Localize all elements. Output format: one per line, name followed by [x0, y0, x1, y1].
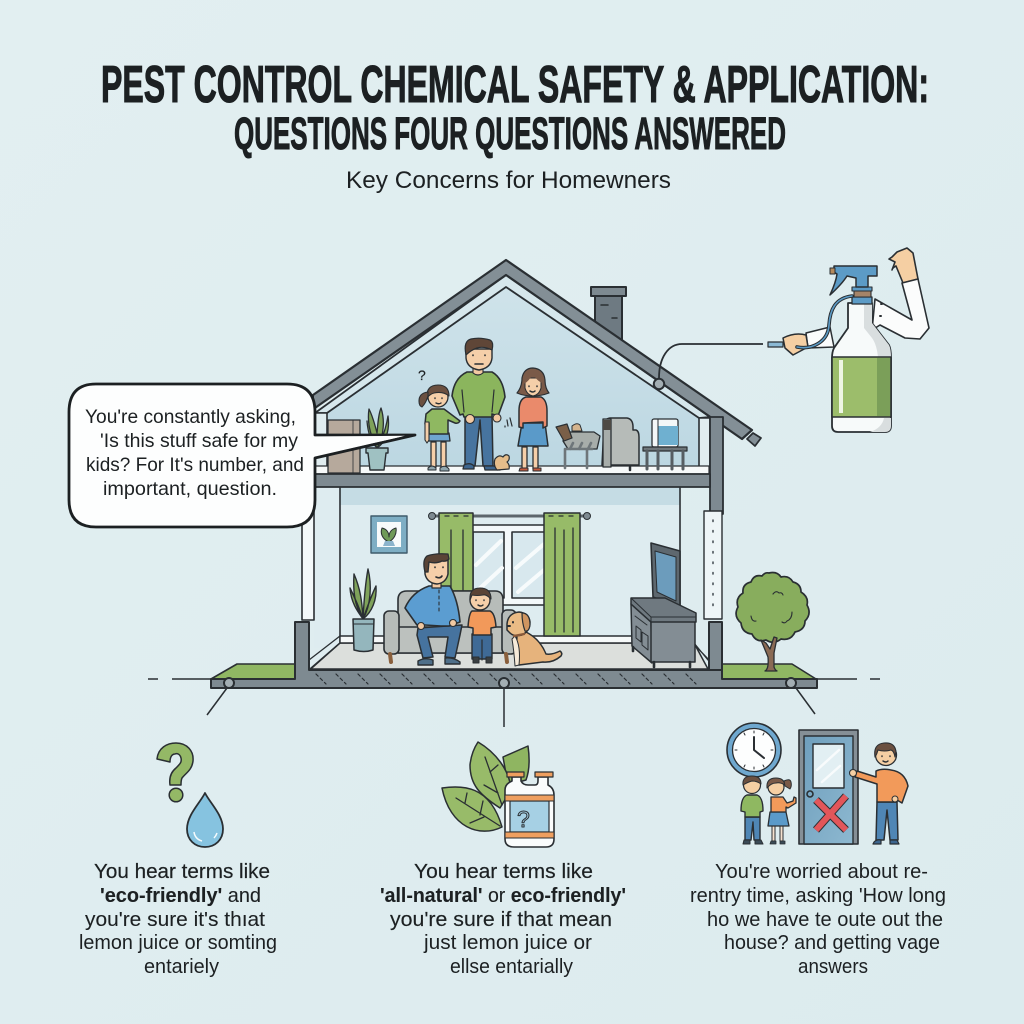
lower room wall [314, 488, 681, 648]
column 3 text: rentry time, asking 'How long [690, 884, 946, 907]
title [101, 56, 929, 159]
girl with pigtail: ? [418, 367, 426, 383]
speech bubble: You're constantly asking, [85, 406, 296, 428]
attic side panels [315, 413, 710, 467]
chimney [591, 287, 626, 342]
column 2 text [380, 860, 626, 978]
tree [736, 572, 809, 671]
standing girl [505, 368, 549, 471]
roof [312, 260, 752, 439]
tv cabinet and tv [631, 543, 696, 667]
attic table and container [643, 419, 687, 469]
grass [211, 664, 816, 679]
speech bubble: 'Is this stuff safe for my [100, 430, 298, 452]
leader: centre [499, 678, 509, 727]
column 3 text: answers [798, 955, 868, 978]
sofa [384, 591, 516, 662]
small puppy toy [494, 455, 509, 470]
seated boy [468, 588, 496, 663]
bottle body [832, 303, 891, 432]
attic interior [327, 287, 699, 467]
man beside door [850, 743, 908, 844]
leader: left [207, 678, 234, 715]
column 1 text: lemon juice or somting [79, 931, 277, 954]
boy [741, 776, 763, 844]
speech bubble [69, 384, 415, 527]
attic floor slab [315, 466, 710, 487]
column 3 text: house? and getting vage [724, 931, 940, 954]
column 1 text: entariely [144, 955, 220, 978]
column 1 text: you're sure it's thıat [85, 908, 265, 931]
right wall column [704, 417, 723, 619]
window [466, 525, 551, 605]
clock [727, 723, 781, 777]
callout connector to spray bottle [654, 344, 763, 389]
raised arm and hand [872, 248, 929, 339]
icon: leaves and bottle: ? [517, 806, 530, 832]
left curtain [439, 513, 473, 591]
plant lower [350, 569, 376, 652]
column 3 text [690, 860, 946, 978]
seated dog [507, 612, 562, 666]
spray wand [768, 342, 783, 347]
column 2 text: You hear terms like [414, 860, 593, 883]
column 2 text: just lemon juice or [423, 931, 592, 954]
door [799, 730, 858, 844]
subtitle: Key Concerns for Homewners [346, 167, 671, 194]
column 2 text: you're sure if that mean [390, 908, 612, 931]
attic plant [366, 408, 389, 470]
girl with pigtail [418, 367, 460, 471]
attic box [328, 420, 360, 473]
speech bubble: kids? For It's number, and [86, 454, 304, 476]
framed picture [371, 516, 407, 553]
column 2 text: 'all-natural' or eco-friendly' [380, 884, 626, 907]
hose [797, 296, 852, 348]
attic soffit band [315, 275, 710, 418]
curtain rod [428, 512, 590, 520]
ground line left [148, 678, 212, 680]
column 3 text: ho we have te oute out the [707, 908, 943, 931]
leader: right [786, 678, 815, 714]
right curtain [544, 513, 580, 636]
bottle spray head [830, 266, 877, 304]
column 1 text [79, 860, 277, 978]
column 1 text: 'eco-friendly' and [100, 884, 261, 907]
speech bubble: important, question. [103, 478, 277, 500]
attic sofa [602, 418, 639, 470]
roof end cap [747, 433, 761, 446]
left sleeve and hand [783, 327, 834, 355]
ground line right [817, 678, 880, 680]
floor [309, 636, 709, 669]
attic dog on chair [556, 424, 600, 468]
girl [767, 778, 796, 844]
icon: leaves and bottle [442, 742, 554, 847]
seated father [405, 554, 462, 665]
left white wall [302, 488, 314, 620]
icon: clock, door and family [727, 723, 908, 844]
icon: question mark and water drop [157, 743, 223, 847]
foundation slab [211, 622, 817, 688]
column 1 text: You hear terms like [94, 860, 270, 883]
spray bottle with arms [768, 248, 929, 432]
house cross-section [211, 260, 817, 688]
column 2 text: ellse entarially [450, 955, 574, 978]
standing father [452, 338, 505, 470]
column 3 text: You're worried about re- [715, 860, 928, 883]
